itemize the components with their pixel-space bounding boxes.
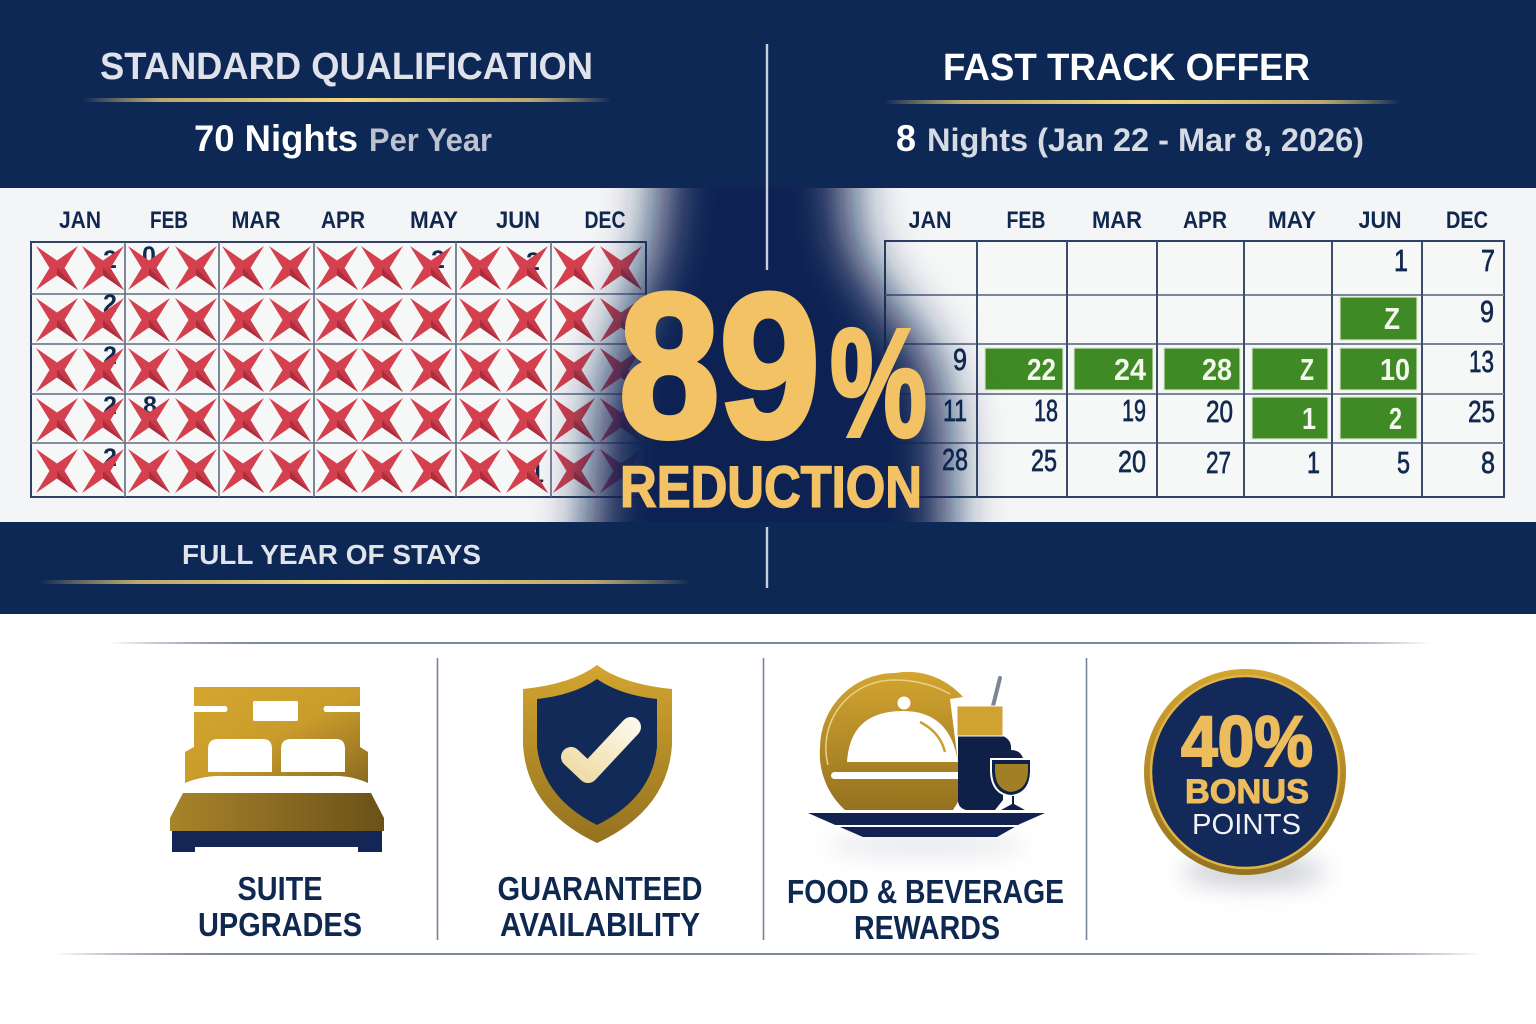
red crosses bbox=[36, 246, 642, 493]
panel: calendar band bbox=[0, 188, 1536, 523]
stray dates under crosses: 8 bbox=[143, 392, 157, 420]
subheading: 70 nights per year: Per Year bbox=[369, 122, 492, 158]
icon: bonus points badge: BONUS bbox=[1185, 773, 1309, 811]
label: food and beverage rewards: REWARDS bbox=[854, 909, 1000, 946]
date numbers: 9 bbox=[1480, 294, 1494, 329]
date numbers: 25 bbox=[1031, 443, 1057, 478]
date numbers: 25 bbox=[1468, 394, 1495, 429]
date numbers: 28 bbox=[1202, 352, 1232, 387]
benefit dividers bbox=[438, 658, 1086, 940]
subheading: 70 nights per year: 70 Nights bbox=[194, 118, 358, 159]
stray dates under crosses: 2 bbox=[103, 444, 117, 472]
icon: bonus points badge: POINTS bbox=[1192, 809, 1301, 841]
left month labels: APR bbox=[321, 207, 365, 234]
left month labels: DEC bbox=[584, 207, 626, 234]
stray dates under crosses bbox=[103, 242, 544, 488]
navy glow behind statistic bbox=[544, 188, 994, 522]
date numbers: 2 bbox=[1389, 401, 1402, 436]
date numbers: 28 bbox=[942, 442, 968, 477]
date numbers: Z bbox=[1384, 301, 1400, 336]
date numbers: 9 bbox=[953, 342, 967, 377]
date numbers: 24 bbox=[1114, 352, 1147, 387]
date numbers: 22 bbox=[1027, 352, 1056, 387]
green highlighted nights bbox=[985, 297, 1417, 439]
right month labels bbox=[908, 207, 1488, 234]
right month labels: DEC bbox=[1446, 207, 1488, 234]
date numbers: 27 bbox=[1206, 445, 1231, 480]
date numbers: 7 bbox=[1481, 243, 1495, 278]
label: guaranteed availability bbox=[498, 870, 702, 943]
statistic: 89% reduction bbox=[619, 252, 927, 520]
date numbers: 1 bbox=[1307, 445, 1320, 480]
right month labels: JUN bbox=[1358, 207, 1402, 234]
icon: bonus points badge bbox=[1144, 669, 1346, 886]
stray dates under crosses: 2 bbox=[431, 246, 445, 274]
centre divider bbox=[766, 44, 768, 588]
date numbers: 19 bbox=[1122, 393, 1146, 428]
date numbers: 11 bbox=[943, 393, 967, 428]
statistic: 89% reduction: % bbox=[830, 297, 927, 469]
subheading: 70 nights per year bbox=[194, 118, 492, 159]
left month labels: JAN bbox=[59, 207, 101, 234]
gold rule bottom left bbox=[40, 580, 690, 584]
panel: navy footer band bbox=[0, 522, 1536, 614]
label: guaranteed availability: AVAILABILITY bbox=[500, 906, 700, 943]
stray dates under crosses: 0 bbox=[142, 242, 156, 270]
date numbers: 8 bbox=[1481, 445, 1495, 480]
date numbers: 13 bbox=[1469, 344, 1494, 379]
icon: bonus points badge: 40% bbox=[1181, 703, 1313, 782]
right month labels: JAN bbox=[908, 207, 952, 234]
date numbers: Z bbox=[1300, 352, 1314, 387]
statistic: 89% reduction: 89 bbox=[619, 252, 820, 480]
label: suite upgrades: UPGRADES bbox=[198, 906, 362, 943]
stray dates under crosses: 2 bbox=[103, 392, 117, 420]
right month labels: FEB bbox=[1006, 207, 1046, 234]
left month labels: JUN bbox=[496, 207, 540, 234]
date numbers: 10 bbox=[1380, 352, 1410, 387]
date numbers bbox=[942, 243, 1495, 480]
stray dates under crosses: 1 bbox=[530, 460, 544, 488]
date numbers: 5 bbox=[1397, 445, 1410, 480]
stray dates under crosses: 2 bbox=[103, 342, 117, 370]
right month labels: APR bbox=[1183, 207, 1227, 234]
label: food and beverage rewards: FOOD & BEVERAGE bbox=[787, 873, 1064, 910]
left month labels: MAR bbox=[232, 207, 280, 234]
gold rule left bbox=[83, 98, 611, 102]
right month labels: MAY bbox=[1268, 207, 1316, 234]
label: suite upgrades: SUITE bbox=[238, 870, 322, 907]
label: suite upgrades bbox=[198, 870, 362, 943]
icon: bed bbox=[170, 687, 384, 852]
date numbers: 1 bbox=[1394, 243, 1408, 278]
heading: standard qualification: STANDARD QUALIFICATION bbox=[100, 46, 593, 88]
left month labels: MAY bbox=[410, 207, 458, 234]
label: food and beverage rewards bbox=[787, 873, 1064, 946]
subheading: 8 nights dates: Nights (Jan 22 - Mar 8, 2026) bbox=[927, 122, 1364, 158]
benefits top rule bbox=[110, 642, 1430, 644]
statistic: 89% reduction: REDUCTION bbox=[620, 455, 922, 520]
icon: food and beverage bbox=[808, 672, 1045, 854]
subheading: 8 nights dates: 8 bbox=[896, 118, 916, 159]
panel: navy header band bbox=[0, 0, 1536, 188]
stray dates under crosses: 2 bbox=[103, 246, 117, 274]
heading: fast track offer: FAST TRACK OFFER bbox=[943, 47, 1310, 89]
gold rule right bbox=[885, 100, 1400, 104]
caption: full year of stays: FULL YEAR OF STAYS bbox=[182, 539, 481, 570]
left calendar: crossed out full year bbox=[31, 242, 646, 497]
left month labels bbox=[59, 207, 626, 234]
date numbers: 20 bbox=[1206, 394, 1233, 429]
date numbers: 20 bbox=[1118, 444, 1146, 479]
date numbers: 18 bbox=[1034, 393, 1058, 428]
label: guaranteed availability: GUARANTEED bbox=[498, 870, 702, 907]
left month labels: FEB bbox=[150, 207, 188, 234]
right calendar: fast track bbox=[885, 241, 1504, 497]
right month labels: MAR bbox=[1092, 207, 1142, 234]
stray dates under crosses: 2 bbox=[103, 290, 117, 318]
stray dates under crosses: 2 bbox=[526, 248, 540, 276]
date numbers: 1 bbox=[1302, 401, 1316, 436]
benefits bottom rule bbox=[55, 953, 1480, 955]
icon: shield with check bbox=[523, 665, 672, 843]
